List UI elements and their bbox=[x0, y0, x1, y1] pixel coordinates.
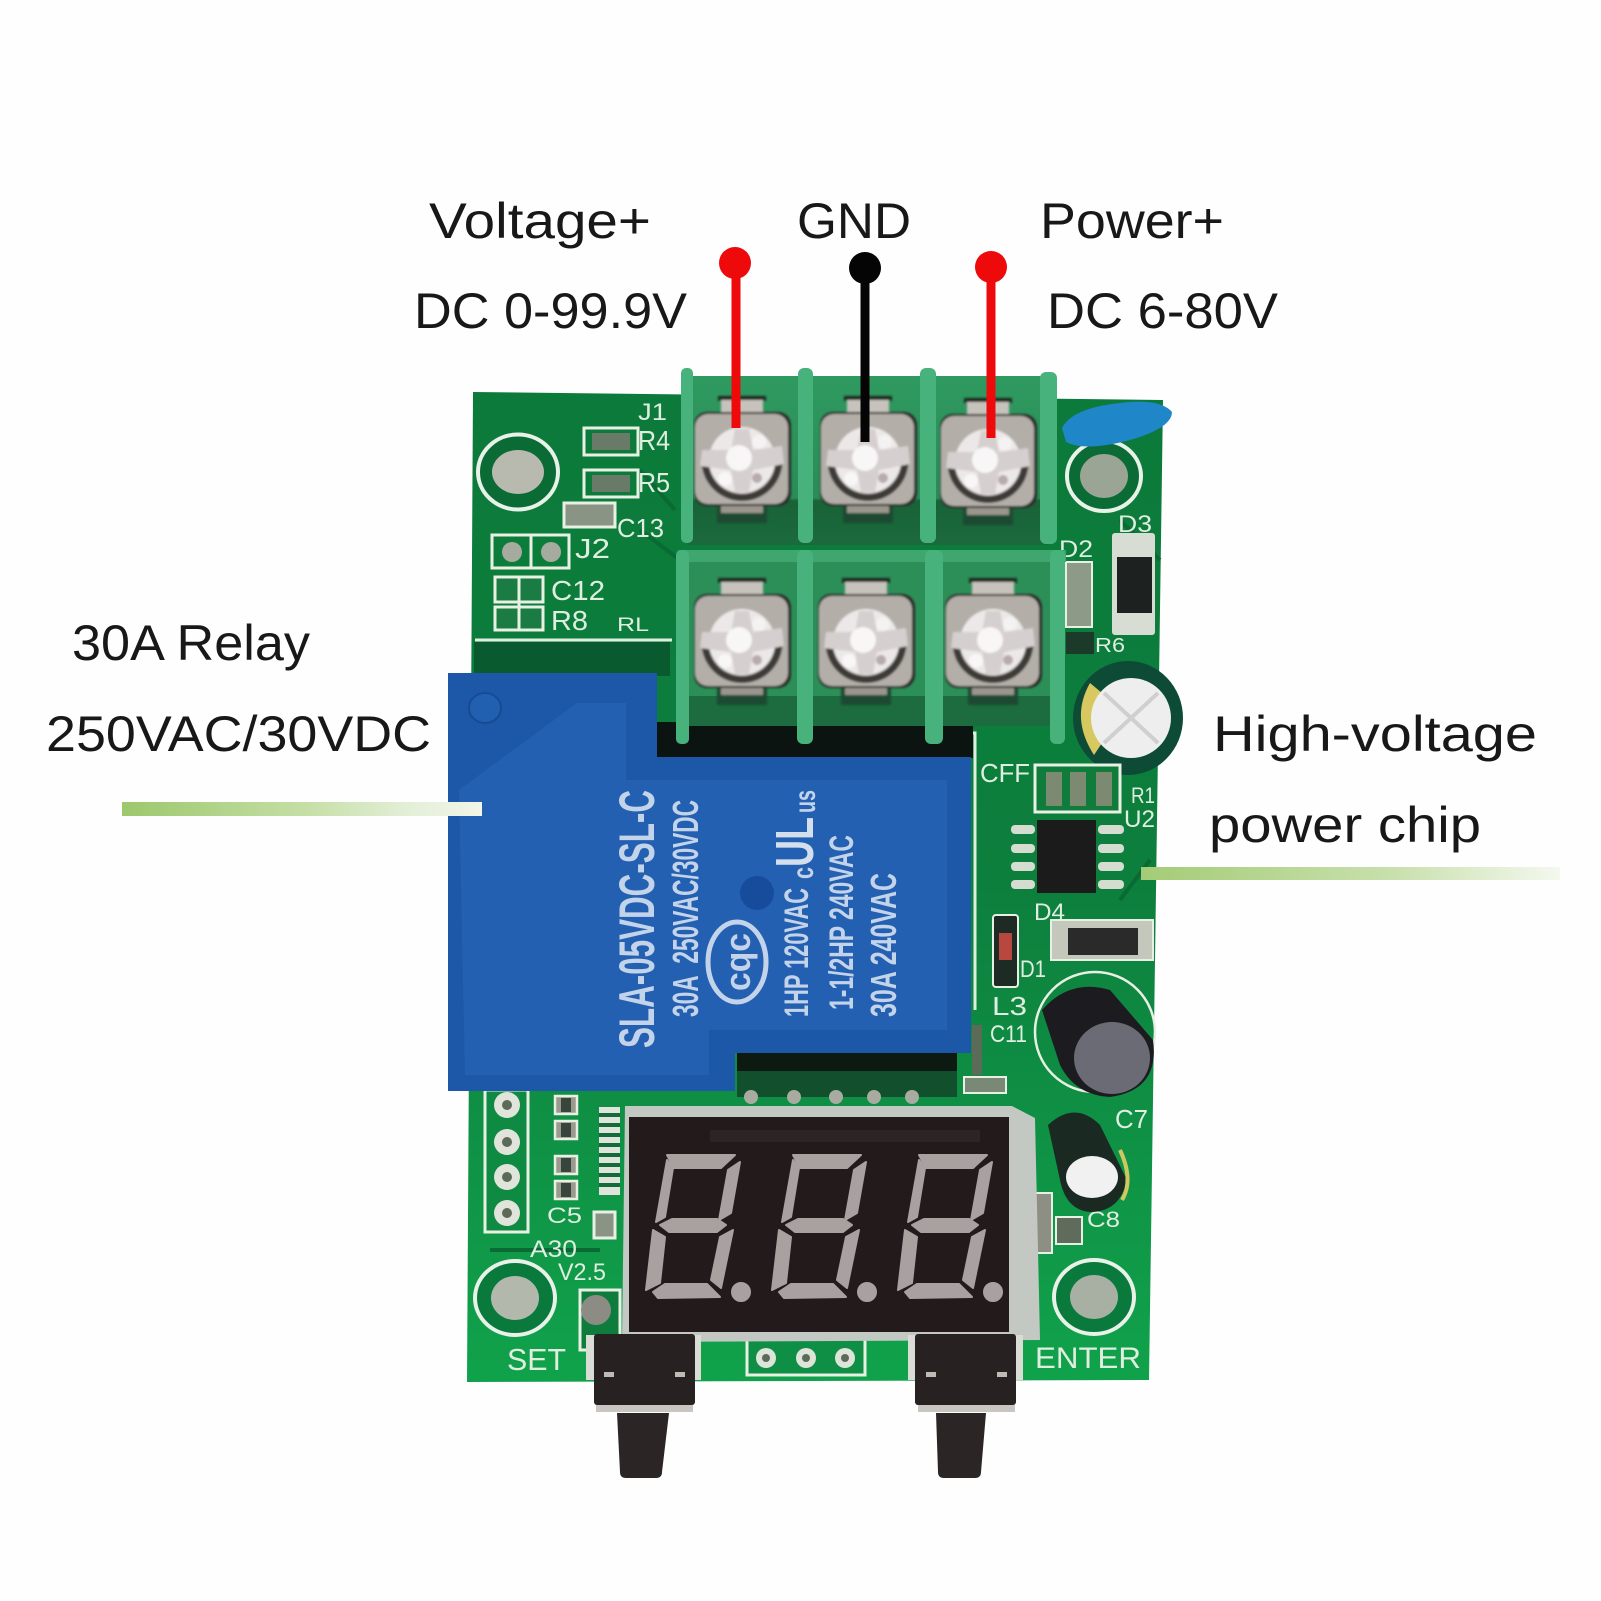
terminal block: bottom row bbox=[676, 550, 1066, 744]
capacitor c7 bbox=[1048, 1112, 1128, 1212]
silkscreen labels: C13 bbox=[617, 513, 664, 543]
silkscreen labels: D2 bbox=[1059, 536, 1093, 563]
smd pads left bbox=[492, 428, 638, 630]
board traces bbox=[474, 470, 1160, 1250]
dark gap under terminals bbox=[657, 722, 973, 758]
circuit board bbox=[467, 392, 1183, 1382]
led display bbox=[622, 1106, 1040, 1342]
header row under relay bbox=[737, 1025, 1006, 1104]
label: power+: Power+ bbox=[1040, 193, 1224, 249]
digit 2 bbox=[772, 1155, 876, 1301]
mounting hole top right bbox=[1067, 441, 1141, 511]
pointer bar: relay bbox=[122, 802, 482, 816]
silkscreen labels: D1 bbox=[1020, 956, 1046, 983]
button: enter bbox=[908, 1334, 1023, 1478]
relay body bbox=[448, 673, 971, 1091]
relay: 30A 240VAC bbox=[863, 873, 904, 1017]
bottom screws bbox=[694, 578, 1042, 705]
capacitor: blue disc bbox=[1062, 402, 1172, 447]
silkscreen labels: C5 bbox=[547, 1203, 582, 1228]
silkscreen labels: R8 bbox=[551, 605, 588, 636]
silkscreen labels: R5 bbox=[638, 467, 670, 498]
pointer: gnd wire bbox=[849, 252, 881, 442]
ul mark: c bbox=[787, 867, 820, 879]
relay top face bbox=[459, 703, 947, 1075]
silkscreen labels: A30 bbox=[530, 1236, 577, 1263]
button: set bbox=[586, 1334, 701, 1478]
relay round mark bbox=[740, 876, 774, 910]
label: dc 6-80v: DC 6-80V bbox=[1047, 283, 1279, 339]
display printed mark bbox=[710, 1130, 980, 1142]
silkscreen labels: C12 bbox=[551, 575, 605, 606]
silkscreen labels: C7 bbox=[1115, 1104, 1148, 1134]
capacitor c1 bbox=[1073, 661, 1183, 775]
label: gnd: GND bbox=[797, 193, 911, 249]
pointer: power wire bbox=[975, 251, 1007, 438]
silkscreen labels: R1 bbox=[1131, 783, 1155, 808]
digit 3 bbox=[898, 1155, 1002, 1301]
label: voltage+: Voltage+ bbox=[429, 193, 651, 249]
relay outline silk bbox=[940, 733, 975, 1010]
resistor pack bbox=[1035, 765, 1120, 812]
label: high-voltage: High-voltage bbox=[1213, 706, 1537, 762]
diode d1 bbox=[993, 915, 1018, 987]
mounting hole bottom left bbox=[475, 1261, 555, 1335]
relay model text: SLA-05VDC-SL-C bbox=[609, 790, 665, 1048]
ul mark: UL bbox=[765, 817, 825, 867]
silkscreen labels: C8 bbox=[1087, 1207, 1120, 1232]
relay: 1-1/2HP 240VAC bbox=[823, 835, 861, 1010]
silkscreen labels: SET bbox=[507, 1342, 566, 1377]
label: 250vac/30vdc: 250VAC/30VDC bbox=[46, 706, 431, 762]
transistor bbox=[580, 1290, 620, 1350]
smd right of display bbox=[1033, 1193, 1082, 1253]
diode d2 bbox=[1066, 562, 1092, 627]
silkscreen labels: C11 bbox=[990, 1021, 1027, 1048]
small pad bbox=[594, 1212, 615, 1238]
digit 1 bbox=[646, 1155, 750, 1301]
resistor r6: R6 bbox=[1095, 635, 1125, 657]
silkscreen labels: ENTER bbox=[1035, 1342, 1141, 1375]
silkscreen labels: J1 bbox=[638, 399, 667, 426]
cqc mark bbox=[708, 922, 766, 1002]
relay spec lines: 1HP 120VAC bbox=[778, 888, 816, 1017]
silkscreen labels: CFF bbox=[980, 758, 1030, 788]
silkscreen labels: L3 bbox=[992, 991, 1027, 1021]
display frame bbox=[622, 1106, 1040, 1342]
label: dc 0-99.9v: DC 0-99.9V bbox=[414, 283, 688, 339]
silkscreen labels bbox=[507, 399, 1155, 1377]
relay rating text: 30A 250VAC/30VDC bbox=[665, 800, 706, 1017]
resistor r6 bbox=[1066, 632, 1125, 657]
pin header left bbox=[485, 1090, 528, 1232]
cqc mark: cqc bbox=[717, 933, 758, 991]
display face bbox=[629, 1117, 1009, 1332]
terminal block: top row bbox=[681, 368, 1057, 545]
silkscreen labels: RL bbox=[617, 615, 649, 636]
pointer bar: power chip bbox=[1141, 867, 1560, 880]
pin comb bbox=[599, 1107, 620, 1195]
test pads bottom center bbox=[747, 1338, 865, 1375]
relay bbox=[448, 673, 971, 1091]
chip u2: high-voltage power chip bbox=[1011, 820, 1124, 893]
ul mark: us bbox=[789, 790, 822, 813]
diode d3 bbox=[1112, 533, 1155, 635]
silkscreen labels: J2 bbox=[575, 533, 610, 564]
silkscreen labels: U2 bbox=[1124, 806, 1155, 833]
label: power chip: power chip bbox=[1209, 797, 1481, 853]
smd column left of display bbox=[555, 1096, 577, 1199]
silkscreen labels: D3 bbox=[1118, 511, 1152, 538]
mounting hole bottom right bbox=[1054, 1260, 1134, 1334]
inductor l3 bbox=[1035, 972, 1155, 1097]
label: 30a relay: 30A Relay bbox=[72, 615, 310, 671]
diode d4 bbox=[1051, 920, 1153, 960]
pointer: voltage wire bbox=[719, 247, 751, 428]
silkscreen labels: D4 bbox=[1034, 899, 1065, 926]
relay corner mark bbox=[469, 693, 501, 723]
silkscreen labels: R4 bbox=[638, 425, 670, 456]
silkscreen labels: V2.5 bbox=[558, 1259, 606, 1286]
panel: green pcb bbox=[467, 392, 1163, 1382]
top screws bbox=[694, 396, 1037, 525]
mounting hole top left bbox=[478, 434, 558, 510]
